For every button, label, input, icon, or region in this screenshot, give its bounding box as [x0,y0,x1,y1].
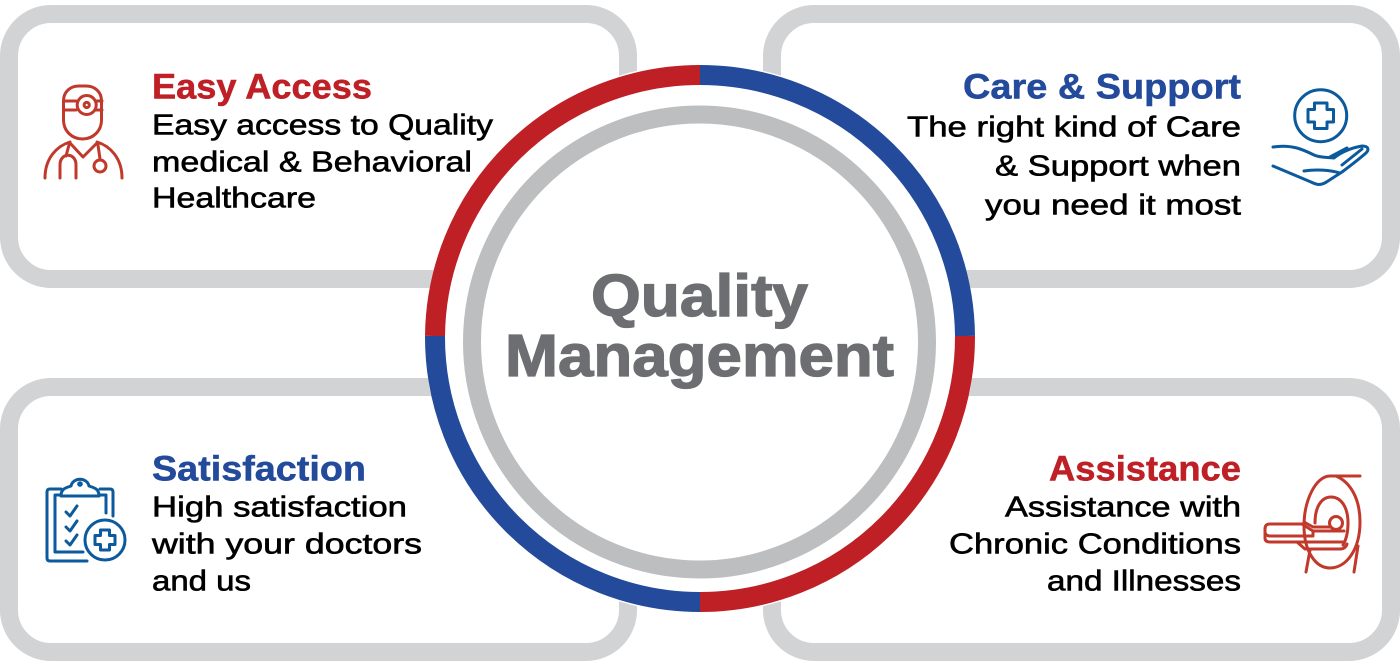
text: easy access description [152,110,494,214]
text: easy access description: Healthcare [152,182,316,214]
ring: inner grey [472,114,927,570]
icon: hand with medical cross [1273,90,1368,184]
ring: red bottom-right arc [700,336,965,602]
panel: satisfaction [9,387,628,652]
heading: satisfaction: Satisfaction [152,450,366,488]
center title [505,263,894,389]
ring: blue bottom-left arc [435,336,700,602]
text: care and support description: you need it most [985,190,1241,222]
text: satisfaction description: with your doctors [151,528,422,560]
text: assistance description: Chronic Conditions [949,528,1241,560]
text: satisfaction description: High satisfaction [152,492,407,524]
icon: MRI scanner [1265,476,1360,572]
panel: assistance [772,387,1391,652]
panel: easy access [9,14,628,279]
heading: assistance: Assistance [1049,450,1241,488]
text: easy access description: Easy access to Quality [152,110,494,142]
text: satisfaction description [151,492,422,598]
text: satisfaction description: and us [152,566,251,598]
heading: care and support: Care & Support [963,68,1241,106]
text: care and support description: & Support when [995,150,1241,182]
icon: clipboard with medical cross [47,479,125,561]
ring: blue top-right arc [700,75,965,336]
panel: care and support [772,14,1391,279]
ring: red top-left arc [435,75,700,336]
text: easy access description: medical & Behavioral [152,146,472,178]
text: assistance description [949,492,1241,598]
text: assistance description: and Illnesses [1047,566,1241,598]
icon: doctor [45,86,122,178]
central circle: quality management [425,64,975,614]
heading: easy access: Easy Access [152,68,372,106]
center title: Quality [591,263,808,329]
text: care and support description [907,112,1241,222]
text: care and support description: The right kind of Care [907,112,1241,144]
text: assistance description: Assistance with [1005,492,1241,524]
center title: Management [505,323,894,389]
